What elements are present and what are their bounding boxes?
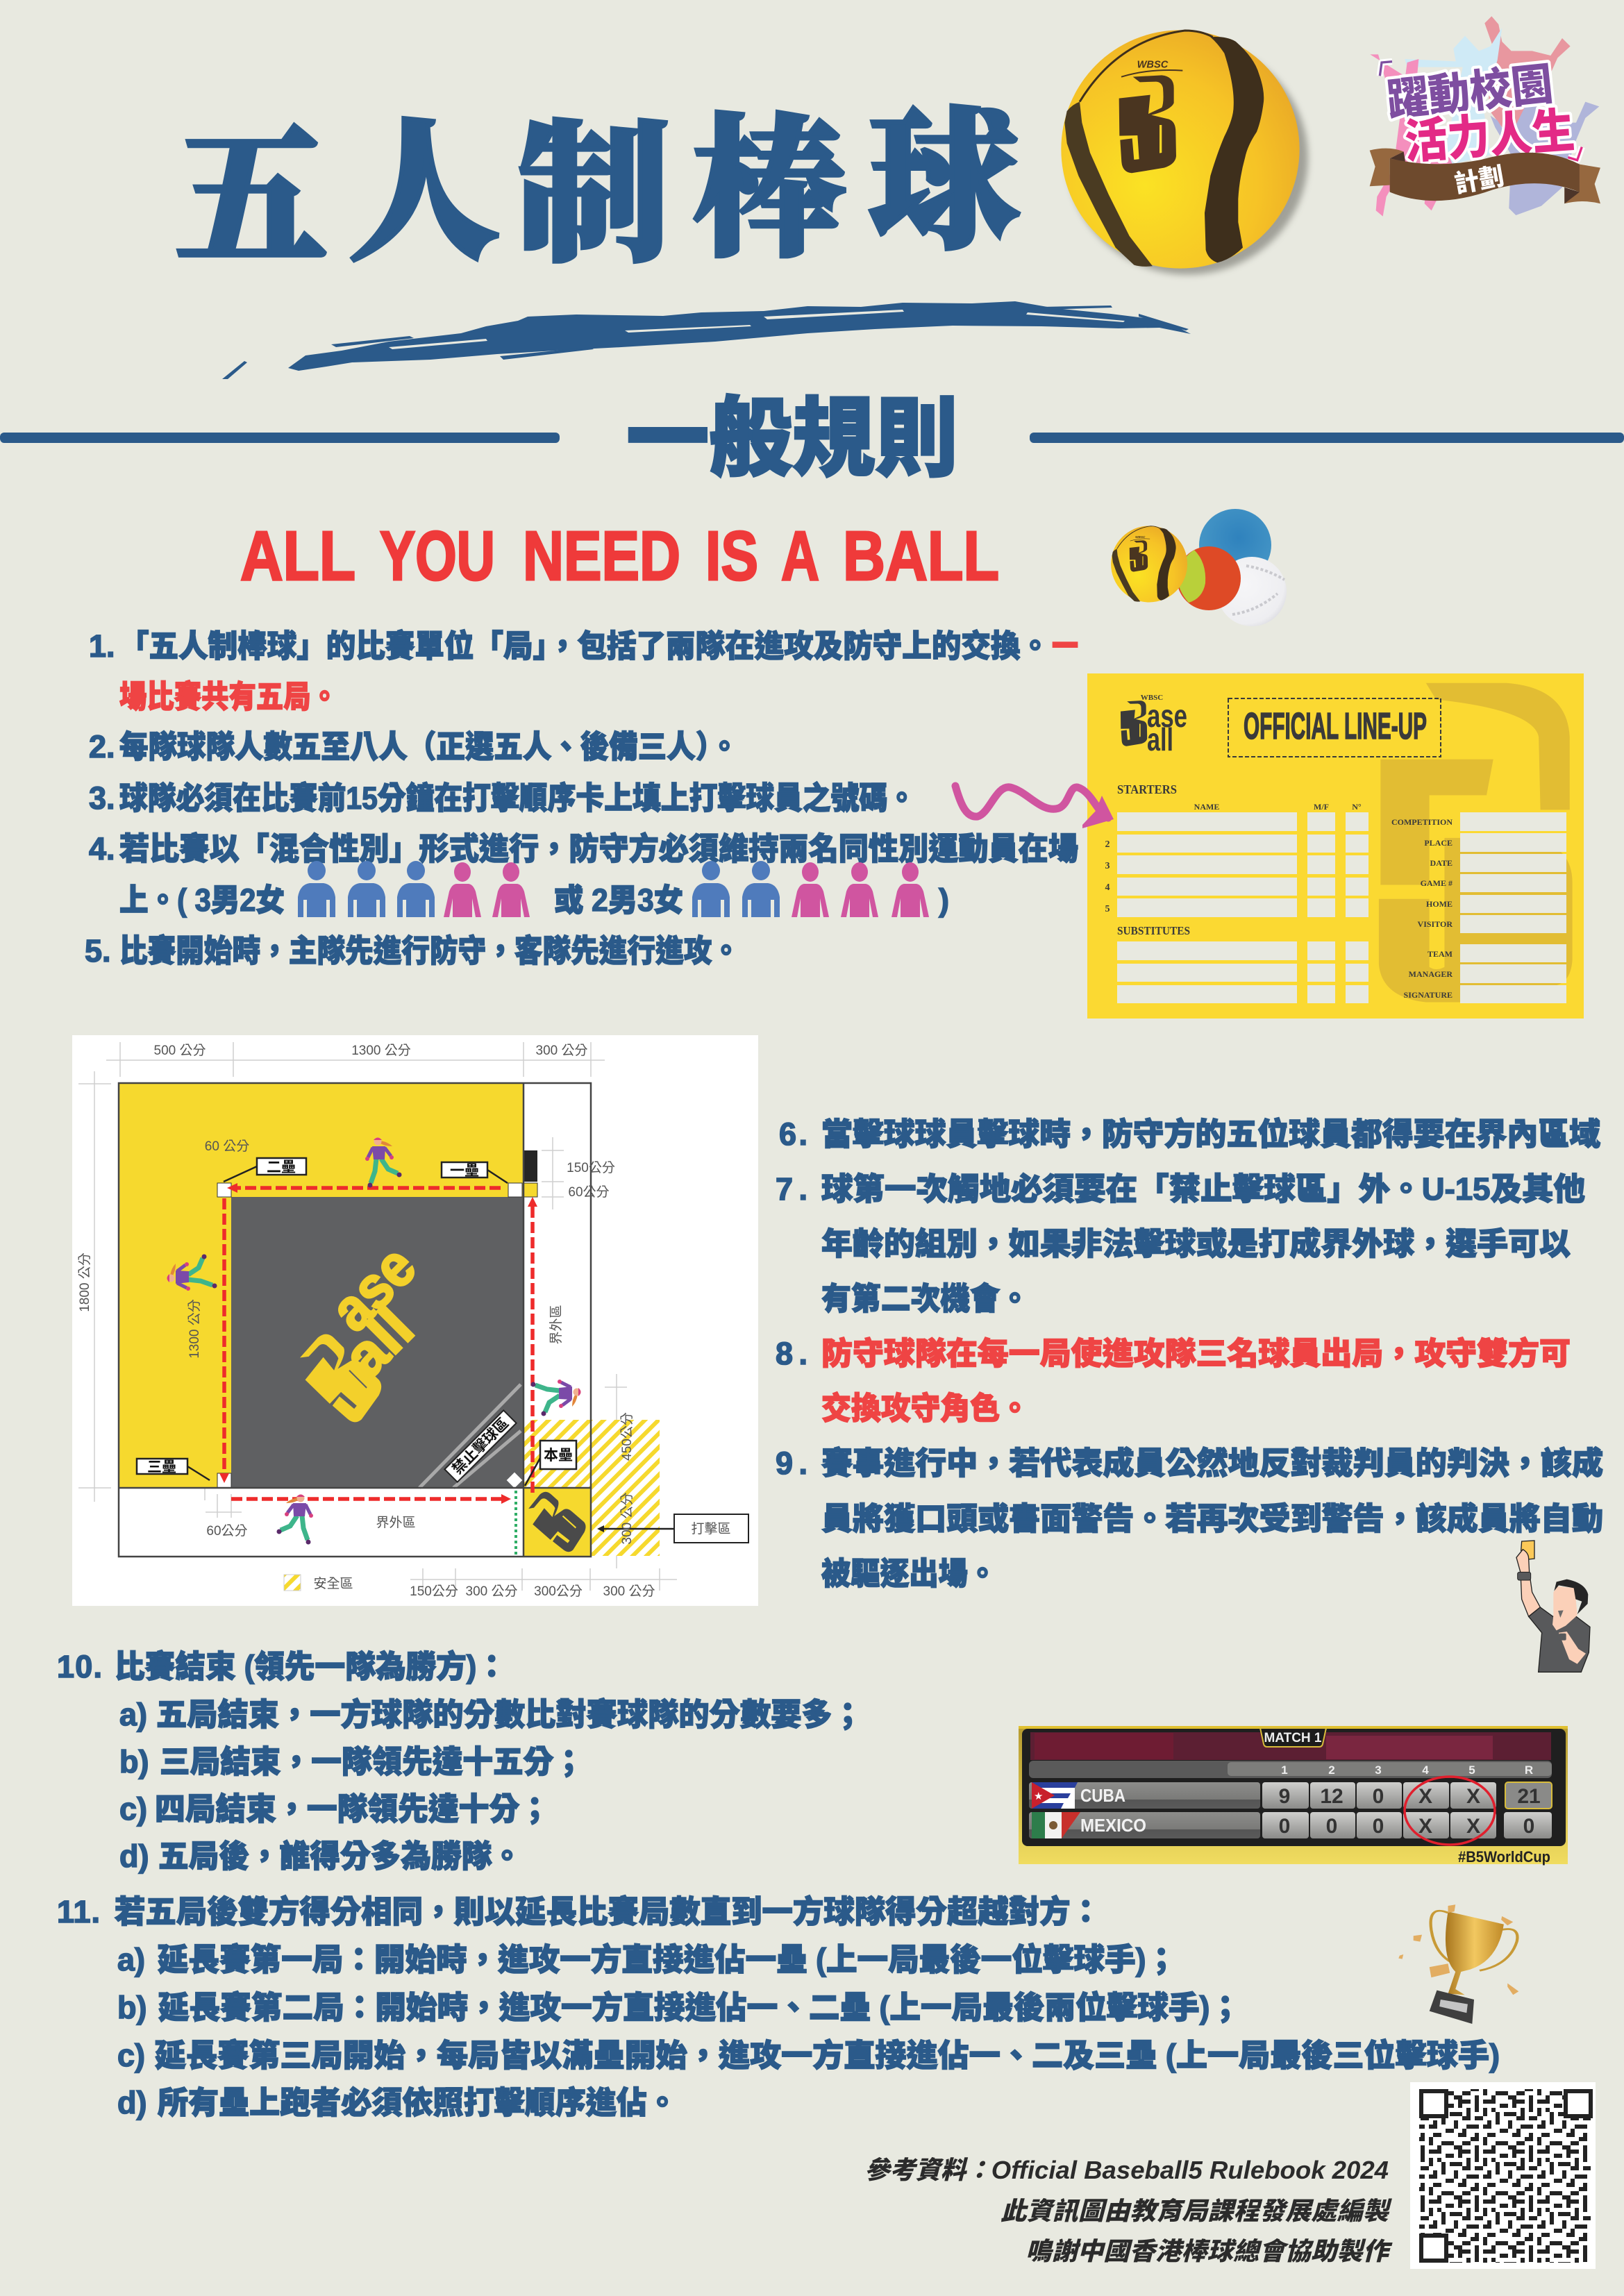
- scoreboard: 4: [1422, 1763, 1429, 1777]
- rule 11: 若五局後雙方得分相同，則以延長比賽局數直到一方球隊得分超越對方：: [115, 1894, 1101, 1929]
- title: 五: [176, 76, 327, 294]
- rule 8: 8.: [776, 1336, 807, 1371]
- panel: official line-up card: HOME: [1426, 899, 1453, 909]
- slogan: ALL: [240, 517, 355, 595]
- section heading bars: [0, 433, 1624, 443]
- rule 10: c): [119, 1791, 147, 1827]
- rule 7: 7.: [776, 1171, 807, 1207]
- slogan: YOU: [380, 517, 495, 595]
- rule 3: 3.: [89, 780, 115, 816]
- rule 11: 11.: [57, 1894, 100, 1929]
- dimension labels: 1800 公分: [77, 1252, 92, 1312]
- base labels: 打擊區: [691, 1521, 731, 1536]
- flag: Cuba: ★: [1034, 1790, 1043, 1802]
- scoreboard: 12: [1320, 1785, 1343, 1808]
- dimension labels: 150公分: [567, 1160, 615, 1175]
- panel: official line-up card: OFFICIAL LINE-UP: [1244, 705, 1427, 747]
- flag: Mexico: [1032, 1812, 1080, 1838]
- dimension labels: 150公分: [410, 1584, 458, 1599]
- rule 6: 6.: [779, 1116, 807, 1152]
- rule 2: 2.: [89, 729, 115, 764]
- scoreboard: X: [1466, 1815, 1480, 1838]
- dimension labels: 300 公分: [619, 1493, 635, 1544]
- rule 4: 4.: [89, 831, 115, 866]
- dimension labels: 界外區: [376, 1515, 416, 1530]
- logo: 躍動校園 活力人生 計劃: 活力人生: [1403, 104, 1576, 169]
- panel: official line-up card: DATE: [1430, 858, 1453, 868]
- logo: 躍動校園 活力人生 計劃: [1370, 16, 1600, 217]
- rule 4: ): [939, 882, 949, 918]
- flag: Cuba: [1032, 1782, 1078, 1809]
- panel: official line-up card: COMPETITION: [1391, 817, 1453, 827]
- rule 3: 球隊必須在比賽前15分鐘在打擊順序卡上填上打擊球員之號碼。: [119, 780, 916, 816]
- dimension labels: 1300 公分: [351, 1043, 411, 1058]
- scoreboard: 0: [1373, 1815, 1384, 1838]
- rule 11: c): [117, 2038, 145, 2073]
- base labels: 一壘: [450, 1163, 479, 1179]
- panel: official line-up card: STARTERS: [1117, 782, 1177, 796]
- rule 11: 所有壘上跑者必須依照打擊順序進佔。: [158, 2085, 678, 2120]
- rule 10: d): [119, 1838, 149, 1874]
- rule 10: 10.: [57, 1649, 102, 1684]
- scoreboard: R: [1525, 1763, 1533, 1777]
- panel: official line-up card: GAME #: [1421, 878, 1453, 888]
- field: Baseball5 logo: all: [330, 1295, 426, 1391]
- panel: official line-up card: 2: [1105, 839, 1110, 850]
- dimension labels: 300 公分: [466, 1584, 517, 1599]
- rule 1: 場比賽共有五局。: [119, 679, 338, 714]
- diagonal no-hit zone: [419, 1384, 521, 1488]
- panel: official line-up card: VISITOR: [1418, 919, 1453, 929]
- title: [176, 61, 1020, 294]
- rule 4: 若比賽以「混合性別」形式進行，防守方必須維持兩名同性別運動員在場: [119, 831, 1078, 866]
- field: Baseball5 logo: ase: [318, 1233, 428, 1343]
- field: outline: [119, 1083, 591, 1557]
- scoreboard: 21: [1517, 1785, 1541, 1808]
- rule 9: 9.: [776, 1446, 807, 1481]
- rule 11: 延長賽第二局：開始時，進攻一方直接進佔一、二壘 (上一局最後兩位擊球手)；: [158, 1990, 1241, 2025]
- panel: official line-up card: 4: [1105, 882, 1110, 893]
- field: Baseball5 logo: [291, 1233, 428, 1427]
- scoreboard: MATCH 1: [1264, 1731, 1322, 1745]
- rule 10: [57, 1649, 863, 1874]
- icon: trophy: [1398, 1904, 1518, 2024]
- panel: official line-up card: PLACE: [1424, 838, 1453, 848]
- rule 11: d): [117, 2085, 147, 2120]
- rule 5: 比賽開始時，主隊先進行防守，客隊先進行進攻。: [119, 933, 740, 969]
- rule 2: 每隊球隊人數五至八人（正選五人、後備三人）。: [119, 729, 739, 764]
- dimension labels: 60 公分: [205, 1139, 249, 1154]
- slogan: BALL: [843, 517, 999, 595]
- scoreboard: 0: [1279, 1815, 1290, 1838]
- dimension labels: [77, 1043, 655, 1599]
- dimension labels: 450公分: [619, 1412, 635, 1461]
- dimension labels: 60公分: [206, 1523, 248, 1539]
- panel: official line-up card: [1087, 673, 1584, 1019]
- runners: [167, 1137, 580, 1544]
- arrow: pink squiggle to line-up card: [955, 786, 1114, 828]
- rule 6: 當擊球球員擊球時，防守方的五位球員都得要在界內區域: [821, 1116, 1600, 1152]
- panel: official line-up card: SUBSTITUTES: [1117, 924, 1190, 937]
- dimension labels: 500 公分: [154, 1043, 206, 1058]
- scoreboard: #B5WorldCup: [1458, 1848, 1550, 1866]
- rule 10: 比賽結束 (領先一隊為勝方)：: [115, 1649, 507, 1684]
- rule 1: [89, 628, 1078, 714]
- icons: 3 men 2 women: [298, 861, 530, 917]
- panel: official line-up card: MANAGER: [1409, 969, 1453, 979]
- rule 4: 或 2男3女: [554, 882, 683, 918]
- base labels: 本壘: [544, 1448, 573, 1464]
- rule 1: 「五人制棒球」的比賽單位「局」，包括了兩隊在進攻及防守上的交換。: [119, 628, 1050, 664]
- rule 5: 5.: [85, 933, 111, 969]
- rule 8: 防守球隊在每一局使進攻隊三名球員出局，攻守雙方可: [821, 1336, 1571, 1371]
- logo: 躍動校園 活力人生 計劃: 計劃: [1452, 162, 1506, 199]
- scoreboard: CUBA: [1080, 1785, 1125, 1806]
- arrows: base running path: [219, 1183, 537, 1504]
- rule 9: [776, 1446, 1603, 1591]
- panel: official line-up card: N°: [1352, 802, 1362, 812]
- brush stroke: [222, 301, 1191, 379]
- dimension labels: 界外區: [549, 1305, 564, 1345]
- rule 10: 三局結束，一隊領先達十五分；: [160, 1744, 584, 1779]
- scoreboard: X: [1466, 1785, 1480, 1808]
- dimension labels: 300 公分: [603, 1584, 655, 1599]
- field: batting square: [524, 1488, 591, 1557]
- scoreboard: X: [1418, 1815, 1432, 1838]
- rule 11: [57, 1894, 1500, 2120]
- title: 棒: [694, 68, 845, 285]
- rule 10: a): [119, 1697, 147, 1732]
- field: gray infield: [231, 1197, 524, 1488]
- dimension labels: 300公分: [534, 1584, 583, 1599]
- scoreboard: 2: [1328, 1763, 1335, 1777]
- rule 9: 賽事進行中，若代表成員公然地反對裁判員的判決，該成: [821, 1446, 1603, 1481]
- rule 7: 年齡的組別，如果非法擊球或是打成界外球，選手可以: [821, 1226, 1571, 1262]
- rule 11: a): [117, 1942, 145, 1977]
- slogan: IS: [705, 517, 758, 595]
- rule 8: [776, 1336, 1571, 1426]
- slogan: [240, 517, 999, 595]
- rule 9: 員將獲口頭或書面警告。若再次受到警告，該成員將自動: [821, 1501, 1603, 1536]
- icon: Baseball5 ball: [1061, 30, 1308, 275]
- dimension labels: 300 公分: [536, 1043, 587, 1058]
- panel: official line-up card: all: [1147, 721, 1173, 757]
- scoreboard: X: [1418, 1785, 1432, 1808]
- rule 1: 一: [1052, 628, 1078, 664]
- scoreboard: 3: [1375, 1763, 1382, 1777]
- scoreboard: 5: [1468, 1763, 1475, 1777]
- icon: four balls: [1111, 509, 1287, 626]
- rule 7: 有第二次機會。: [821, 1281, 1030, 1316]
- panel: official line-up card: NAME: [1194, 802, 1219, 812]
- diagonal no-hit zone: 禁止擊球區: [449, 1415, 512, 1477]
- panel: official line-up card: M/F: [1314, 802, 1329, 812]
- credits: 鳴謝中國香港棒球總會協助製作: [1026, 2237, 1393, 2265]
- title: 人: [349, 72, 500, 290]
- scoreboard: 0: [1523, 1815, 1534, 1838]
- rule 10: b): [119, 1744, 149, 1779]
- dimension labels: 安全區: [313, 1576, 353, 1591]
- field: B5 mark in batting square: [522, 1488, 592, 1556]
- base labels: 三壘: [147, 1459, 176, 1475]
- scoreboard: 0: [1373, 1785, 1384, 1808]
- dimension labels: 60公分: [568, 1184, 610, 1200]
- scoreboard: 9: [1279, 1785, 1290, 1808]
- dimension labels: 1300 公分: [187, 1299, 202, 1359]
- legend: safety zone swatch: [284, 1575, 301, 1591]
- rule 10: 四局結束，一隊領先達十分；: [155, 1791, 550, 1827]
- panel: official line-up card: WBSC: [1141, 694, 1163, 702]
- rule 4: 上。( 3男2女: [119, 882, 285, 918]
- field: bases: [217, 1150, 537, 1488]
- QR code: [1410, 2082, 1596, 2269]
- title: 球: [869, 61, 1020, 278]
- credits: [864, 2156, 1393, 2265]
- base labels: 二壘: [267, 1159, 296, 1175]
- panel: official line-up card: SIGNATURE: [1404, 990, 1453, 1000]
- scoreboard: MEXICO: [1080, 1815, 1146, 1836]
- rule 11: 延長賽第一局：開始時，進攻一方直接進佔一壘 (上一局最後一位擊球手)；: [158, 1942, 1177, 1977]
- logo: 躍動校園 活力人生 計劃: 躍動校園: [1384, 59, 1555, 126]
- rule 10: 五局結束，一方球隊的分數比對賽球隊的分數要多；: [156, 1697, 863, 1732]
- QR finder patterns: [1421, 2091, 1591, 2261]
- panel: official line-up card: 3: [1105, 861, 1110, 871]
- field: yellow fair area: [119, 1083, 524, 1488]
- scoreboard: 0: [1326, 1815, 1337, 1838]
- panel: official line-up card: TEAM: [1428, 949, 1453, 959]
- base labels: [137, 1158, 748, 1543]
- scoreboard: 1: [1281, 1763, 1288, 1777]
- section heading: 一般規則: [626, 391, 958, 487]
- title: 制: [518, 74, 669, 291]
- rule 11: 延長賽第三局開始，每局皆以滿壘開始，進攻一方直接進佔一、二及三壘 (上一局最後三位擊球手): [155, 2038, 1500, 2073]
- rule 10: 五局後，誰得分多為勝隊。: [158, 1838, 522, 1874]
- slogan: A: [781, 517, 819, 595]
- rule 7: [776, 1171, 1585, 1316]
- scoreboard: [1019, 1726, 1568, 1866]
- icons: 2 men 3 women: [692, 861, 929, 917]
- panel: official line-up card: ase: [1147, 698, 1187, 734]
- slogan: NEED: [523, 517, 680, 595]
- rule 9: 被驅逐出場。: [821, 1556, 997, 1591]
- credits: 參考資料：Official Baseball5 Rulebook 2024: [864, 2156, 1389, 2184]
- credits: 此資訊圖由教育局課程發展處編製: [1001, 2197, 1392, 2225]
- panel: field diagram: [72, 1035, 758, 1606]
- icon: referee with yellow card: [1516, 1541, 1590, 1672]
- rule 7: 球第一次觸地必須要在「禁止擊球區」外。U-15及其他: [821, 1171, 1585, 1207]
- rule 11: b): [117, 1990, 147, 2025]
- foul line dotted: [514, 1491, 517, 1556]
- rule 8: 交換攻守角色。: [821, 1391, 1030, 1426]
- rule 1: 1.: [89, 628, 115, 664]
- panel: official line-up card: 5: [1105, 904, 1110, 914]
- field: safety hatch zones: [524, 1420, 660, 1556]
- rule 4: [89, 831, 1078, 918]
